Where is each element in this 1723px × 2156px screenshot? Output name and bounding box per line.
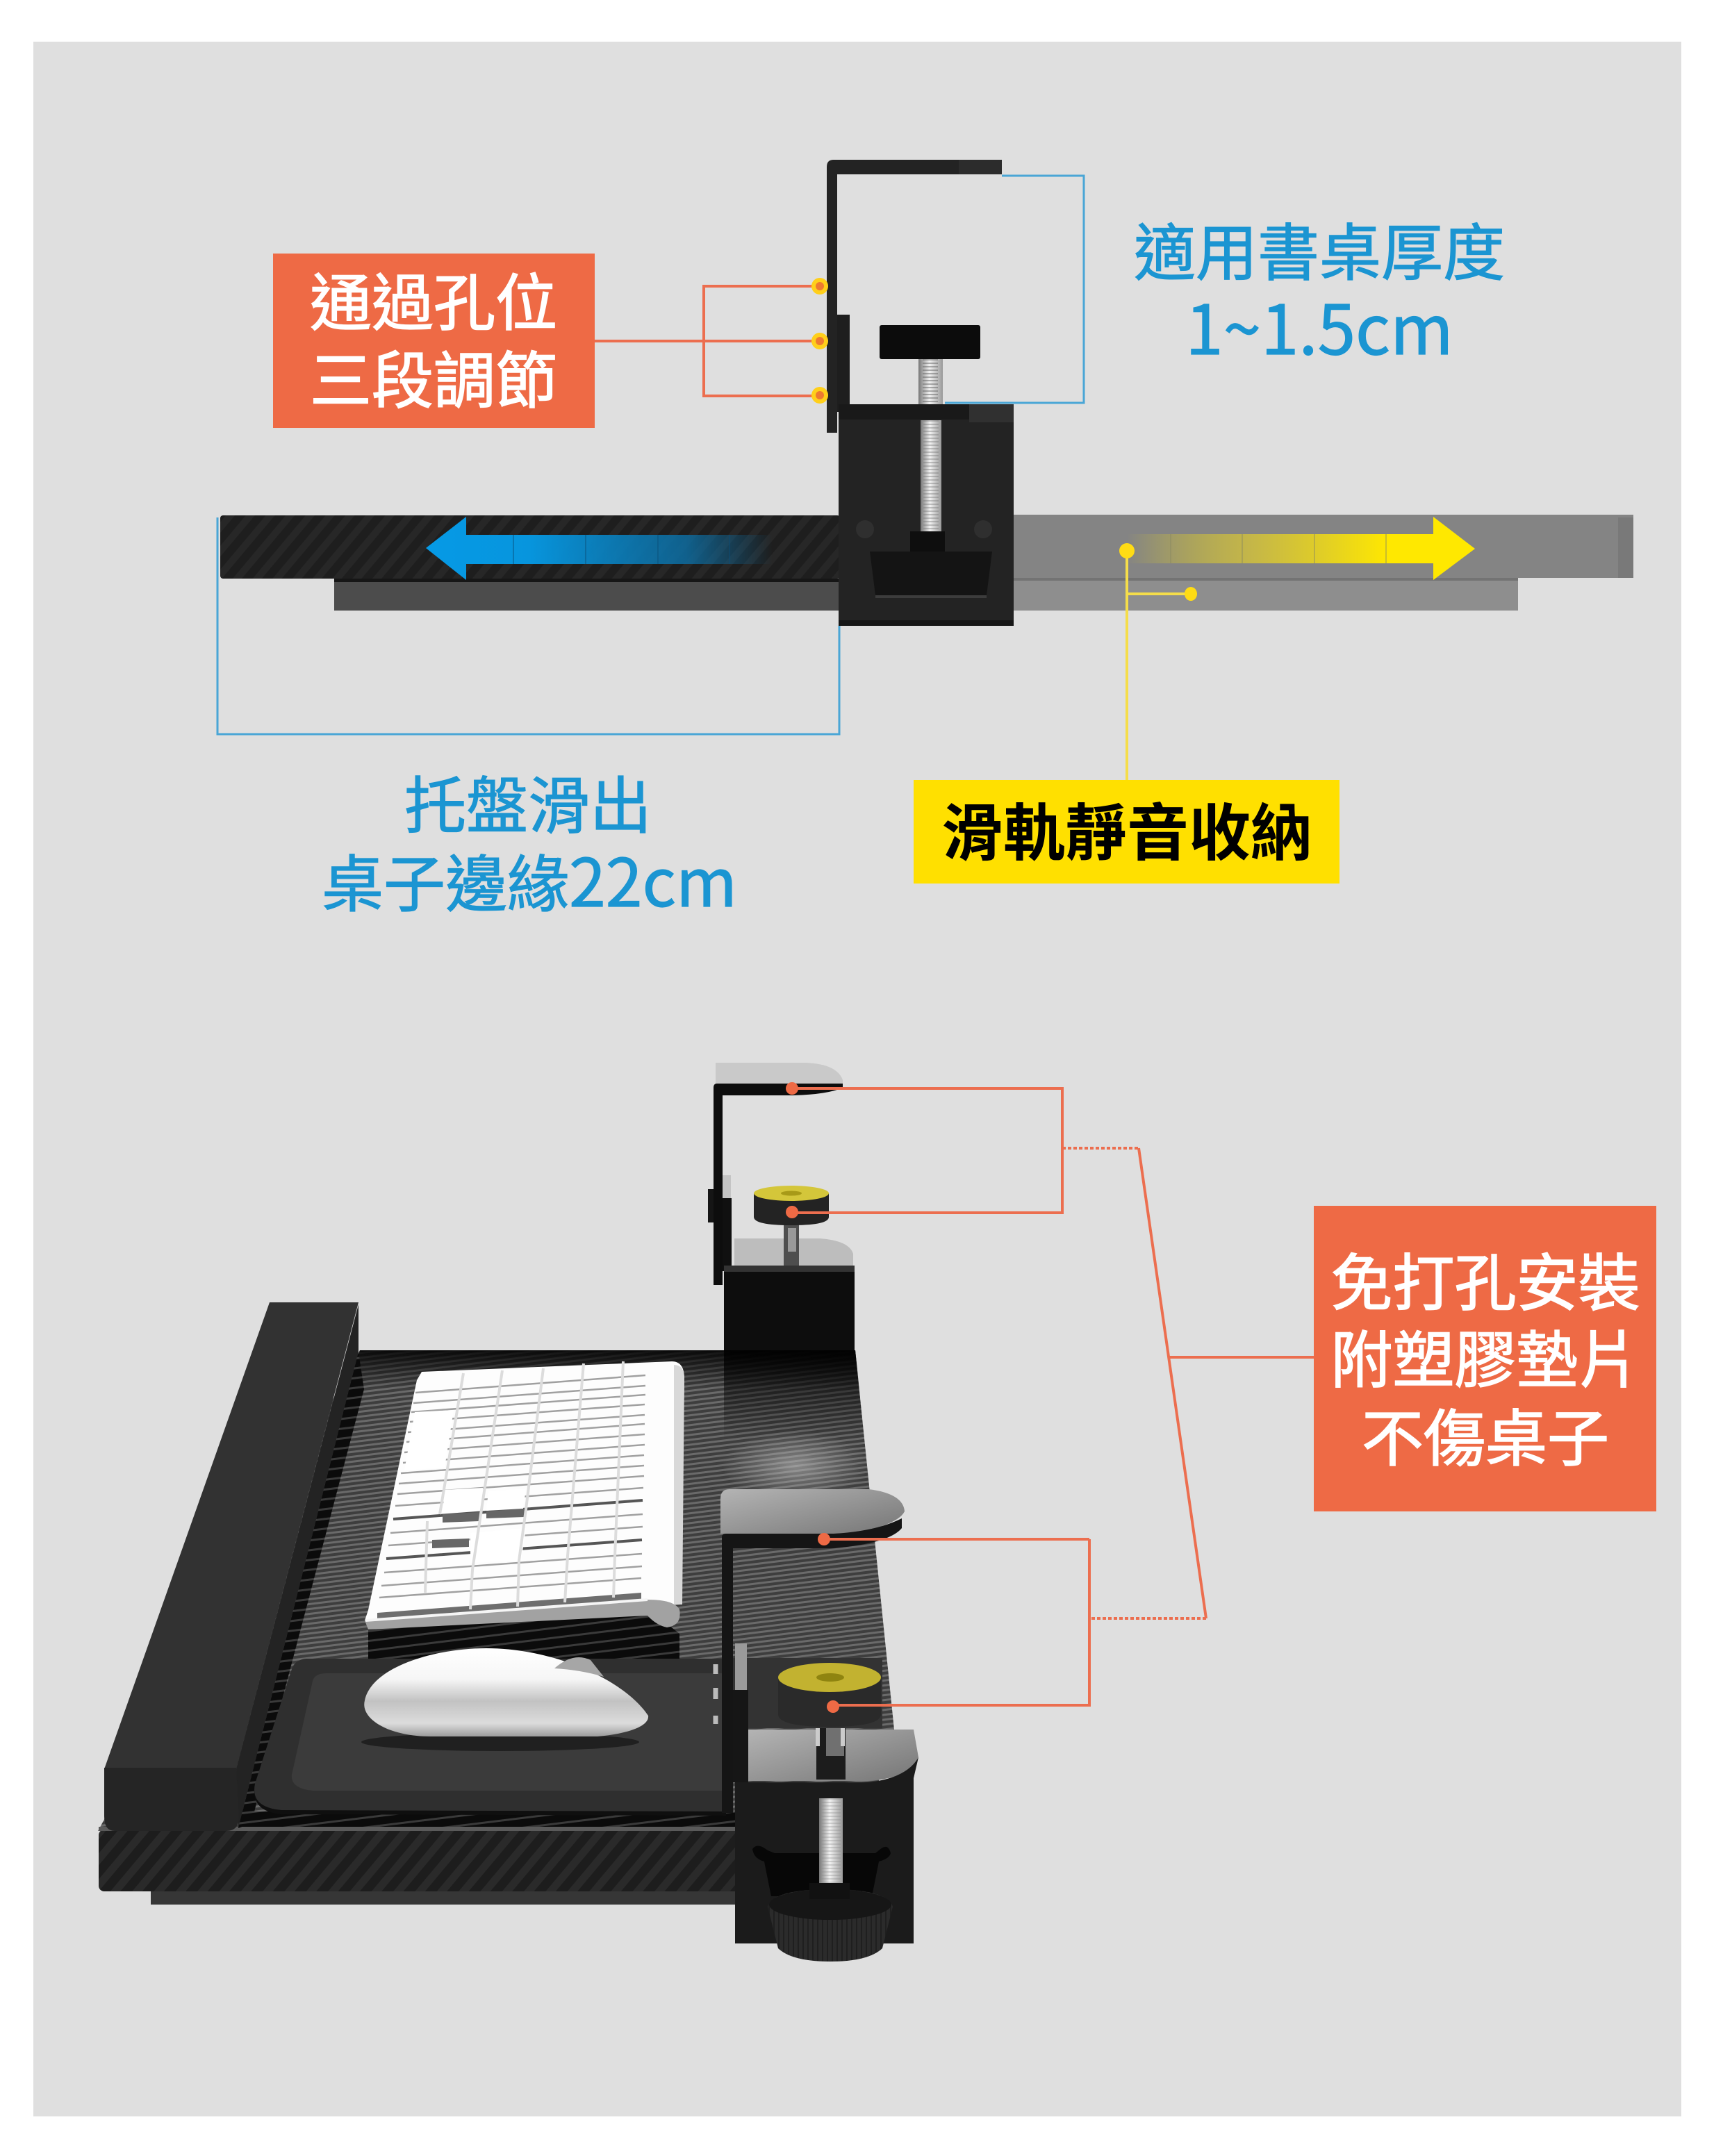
label: three-stage adjustment bbox=[273, 254, 595, 428]
label: applicable desk thickness bbox=[1134, 204, 1505, 374]
label: tray extension distance: 托盤滑出 bbox=[404, 756, 652, 846]
diagram: side view of sliding tray and clamp bbox=[217, 160, 1633, 781]
arrow: slide in right bbox=[1127, 517, 1475, 580]
label: three-stage adjustment: 通過孔位 bbox=[310, 254, 557, 343]
back clamp bbox=[708, 1063, 855, 1352]
label: no drilling with plastic pads: 附塑膠墊片 bbox=[1331, 1311, 1640, 1400]
mouse pad bbox=[254, 1658, 882, 1816]
label: tray extension distance: 桌子邊緣22cm bbox=[322, 831, 737, 926]
tray front face bbox=[99, 1827, 745, 1905]
callout lines: three hole positions bbox=[595, 278, 828, 404]
product: keyboard tray in perspective bbox=[98, 1063, 918, 1962]
mouse bbox=[361, 1648, 648, 1751]
front clamp bbox=[716, 1489, 918, 1962]
keyboard bbox=[365, 1361, 684, 1659]
tray top surface bbox=[98, 1350, 894, 1831]
tray: retracted gray right section bbox=[1014, 515, 1633, 611]
label: applicable desk thickness: 1~1.5cm bbox=[1185, 276, 1453, 374]
keyboard shadow bbox=[368, 1610, 679, 1659]
clamp: side view bbox=[827, 160, 1014, 626]
label: no drilling with plastic pads bbox=[1314, 1206, 1656, 1511]
callout lines: tray slide distance bbox=[217, 517, 839, 734]
callout lines: desk thickness range bbox=[945, 176, 1084, 403]
arrow: slide out left bbox=[426, 517, 773, 580]
callout lines: plastic pads bbox=[786, 1082, 1314, 1713]
callout lines: silent rail bbox=[1119, 543, 1197, 781]
label: applicable desk thickness: 適用書桌厚度 bbox=[1134, 204, 1505, 293]
label: no drilling with plastic pads: 不傷桌子 bbox=[1362, 1389, 1609, 1479]
wrist rest bbox=[104, 1302, 364, 1831]
label: tray extension distance bbox=[322, 756, 737, 926]
label: silent rail storage: 滑軌靜音收納 bbox=[941, 783, 1312, 873]
label: three-stage adjustment: 三段調節 bbox=[310, 331, 557, 421]
tray: extended dark carbon left section bbox=[220, 515, 840, 611]
label: no drilling with plastic pads: 免打孔安裝 bbox=[1331, 1234, 1640, 1323]
